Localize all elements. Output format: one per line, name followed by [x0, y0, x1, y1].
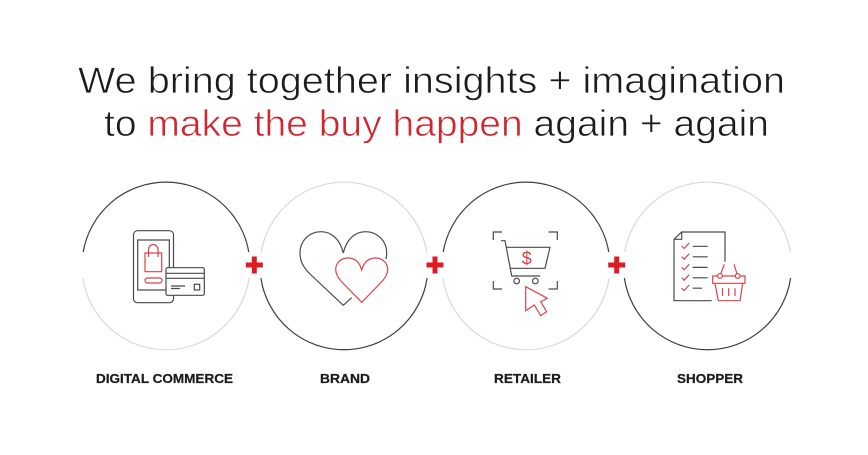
title [78, 60, 785, 144]
icon: shopping cart and cursor: $ [522, 248, 532, 268]
icon: phone with bag and card [134, 231, 204, 303]
icon: shopping cart and cursor [493, 232, 557, 316]
plus sign 3 [608, 256, 625, 274]
panel: digital commerce [83, 182, 249, 350]
label: retailer: RETAILER [494, 371, 562, 386]
title: We bring together insights + imagination [78, 60, 785, 101]
label: digital commerce: DIGITAL COMMERCE [96, 371, 233, 386]
title: to make the buy happen again + again [104, 103, 769, 144]
icon: two hearts [300, 232, 388, 305]
plus sign 2 [426, 256, 444, 274]
icon: checklist and basket [674, 232, 745, 301]
plus sign 1 [246, 256, 263, 274]
label: shopper: SHOPPER [677, 371, 744, 386]
panel: retailer [443, 182, 609, 350]
panel: shopper [624, 182, 791, 350]
panel: brand [261, 182, 427, 350]
label: brand: BRAND [320, 371, 370, 386]
